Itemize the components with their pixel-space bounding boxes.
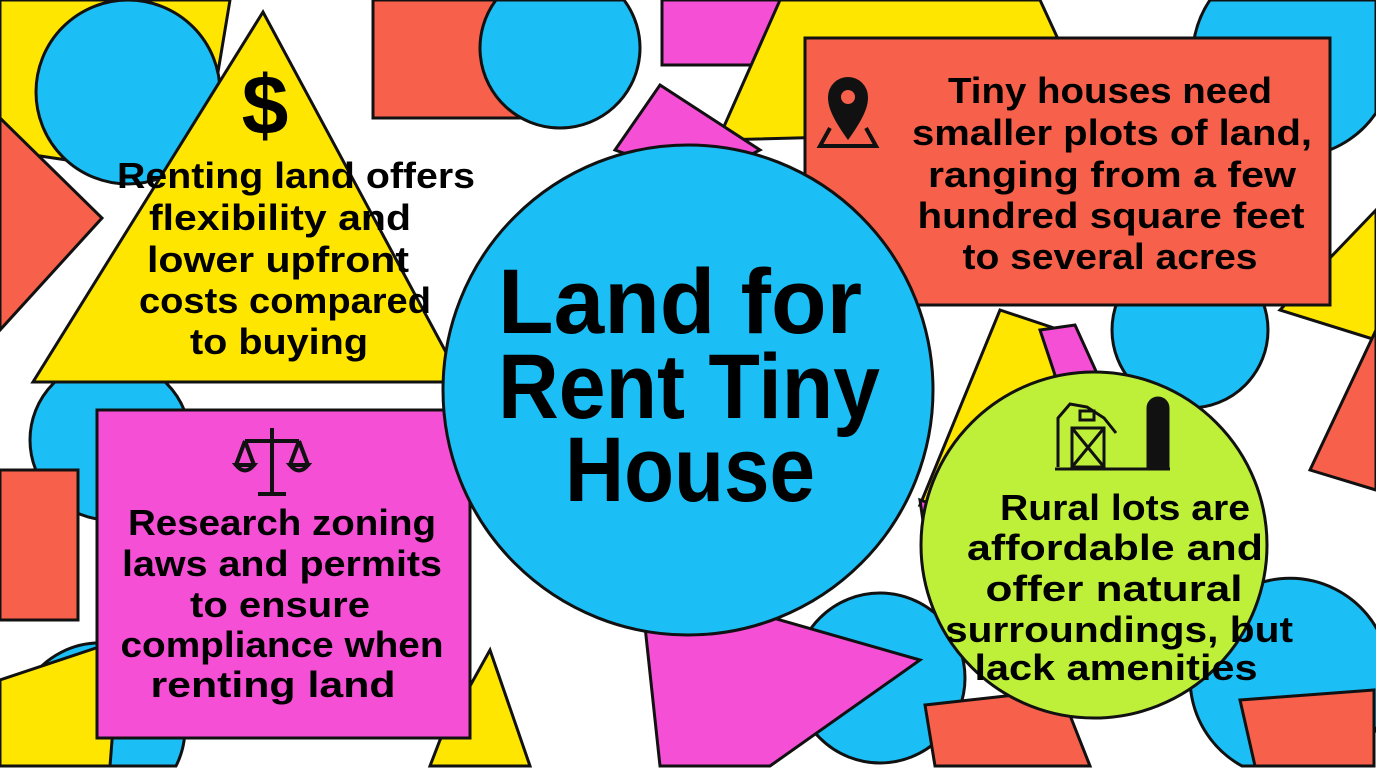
- text: plot sizes: Tiny houses need: [948, 70, 1272, 111]
- text: zoning: renting land: [150, 664, 396, 705]
- text: renting: [117, 155, 475, 362]
- title: Rent Tiny: [498, 336, 880, 438]
- text: renting: Renting land offers: [117, 155, 475, 196]
- title: House: [565, 419, 815, 521]
- panel: rural lots: [921, 372, 1293, 718]
- text: zoning: [120, 502, 444, 705]
- text: plot sizes: smaller plots of land,: [912, 112, 1312, 153]
- title: [498, 251, 880, 521]
- text: renting: lower upfront: [147, 239, 409, 280]
- text: plot sizes: to several acres: [962, 236, 1258, 277]
- panel: plot sizes: [805, 38, 1330, 305]
- icon: map pin: [820, 77, 876, 146]
- panel: title circle: [443, 145, 933, 635]
- text: plot sizes: hundred square feet: [918, 195, 1305, 236]
- text: rural: Rural lots are: [1000, 487, 1250, 528]
- title: Land for: [498, 251, 862, 353]
- text: rural: surroundings, but: [945, 609, 1293, 650]
- text: plot sizes: ranging from a few: [928, 154, 1297, 195]
- text: plot sizes: [912, 70, 1312, 277]
- icon: dollar: $: [242, 58, 288, 152]
- panel: zoning: [97, 410, 470, 738]
- text: zoning: to ensure: [190, 584, 370, 625]
- text: renting: flexibility and: [149, 197, 411, 238]
- text: renting: to buying: [190, 321, 368, 362]
- text: zoning: compliance when: [120, 624, 444, 665]
- text: zoning: laws and permits: [122, 543, 442, 584]
- text: rural: affordable and: [967, 527, 1263, 568]
- icon: barn: [1055, 398, 1170, 469]
- text: renting: costs compared: [139, 280, 431, 321]
- text: zoning: Research zoning: [128, 502, 436, 543]
- text: rural: offer natural: [986, 568, 1242, 609]
- icon: scales: [236, 428, 308, 494]
- panel: renting triangle: [33, 12, 475, 382]
- text: rural: [945, 487, 1293, 688]
- text: rural: lack amenities: [974, 647, 1258, 688]
